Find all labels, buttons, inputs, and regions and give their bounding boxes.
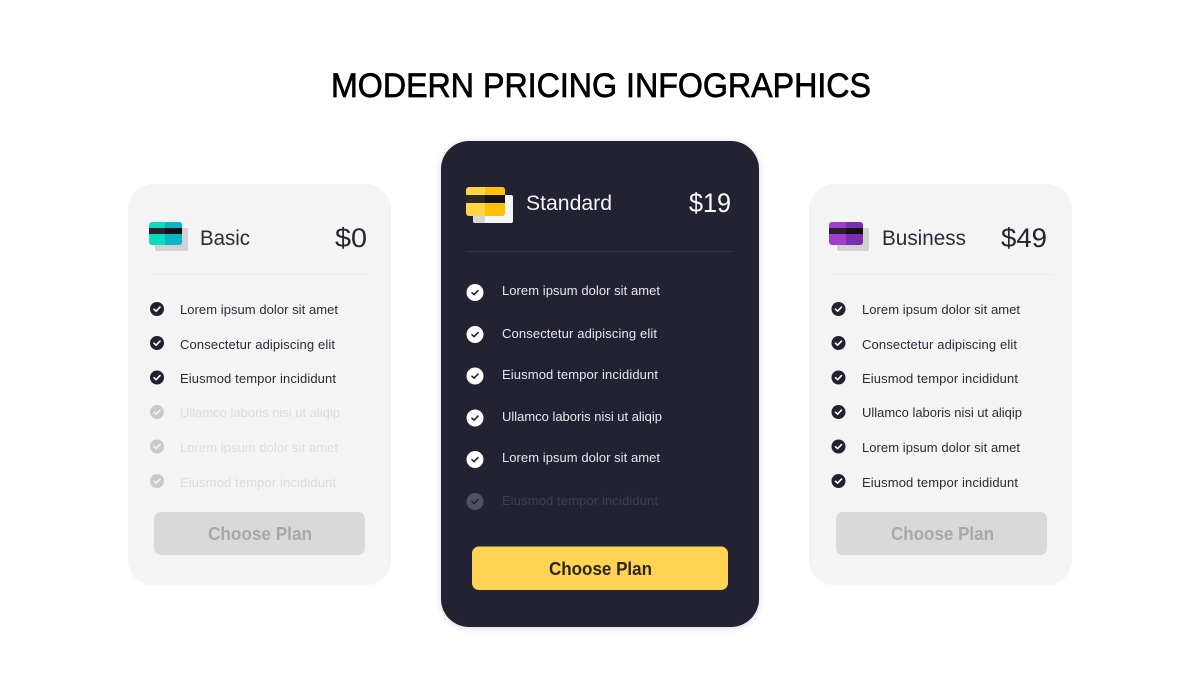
- plan name: Business: Business: [882, 227, 966, 250]
- feature: Lorem ipsum dolor sit amet: [466, 450, 660, 468]
- feature: Lorem ipsum dolor sit amet: Lorem ipsum dolor sit amet: [502, 450, 660, 465]
- feature: Consectetur adipiscing elit: Consectetur adipiscing elit: [502, 326, 657, 341]
- panel: basic plan: [128, 184, 391, 585]
- feature: Consectetur adipiscing elit: Consectetur adipiscing elit: [180, 337, 335, 352]
- feature: Eiusmod tempor incididunt: Eiusmod tempor incididunt: [180, 371, 336, 386]
- feature: Ullamco laboris nisi ut aliqip: Ullamco laboris nisi ut aliqip: [502, 409, 662, 424]
- button: Choose Plan: [836, 512, 1047, 555]
- price: $19: $19: [689, 188, 731, 218]
- button: Choose Plan: [154, 512, 365, 555]
- panel: business plan: [809, 184, 1072, 585]
- panel: standard plan: [441, 141, 759, 627]
- button: Choose Plan: [472, 546, 728, 590]
- button: Choose Plan: Choose Plan: [549, 558, 652, 579]
- feature disabled: Eiusmod tempor incididunt: Eiusmod tempor incididunt: [180, 475, 336, 490]
- icon: teal credit card: [149, 222, 188, 251]
- icon: purple credit card: [829, 222, 869, 251]
- feature: Lorem ipsum dolor sit amet: [466, 283, 660, 301]
- feature: Consectetur adipiscing elit: Consectetur adipiscing elit: [862, 337, 1017, 352]
- feature: Lorem ipsum dolor sit amet: Lorem ipsum dolor sit amet: [862, 302, 1020, 317]
- feature: Lorem ipsum dolor sit amet: Lorem ipsum dolor sit amet: [180, 302, 338, 317]
- icon: yellow credit card: [466, 187, 513, 223]
- price: $0: $0: [335, 223, 367, 253]
- feature: Eiusmod tempor incididunt: Eiusmod tempor incididunt: [862, 475, 1018, 490]
- feature disabled: Eiusmod tempor incididunt: Eiusmod tempor incididunt: [502, 493, 658, 508]
- plan name: Basic: Basic: [200, 227, 250, 250]
- button: Choose Plan: Choose Plan: [208, 523, 312, 544]
- feature disabled: Lorem ipsum dolor sit amet: Lorem ipsum dolor sit amet: [180, 440, 338, 455]
- plan name: Standard: Standard: [526, 191, 612, 215]
- feature: Lorem ipsum dolor sit amet: Lorem ipsum dolor sit amet: [502, 283, 660, 298]
- feature: Ullamco laboris nisi ut aliqip: Ullamco laboris nisi ut aliqip: [862, 405, 1022, 420]
- feature: Eiusmod tempor incididunt: [466, 367, 658, 384]
- title: MODERN PRICING INFOGRAPHICS: [331, 67, 871, 105]
- feature: Eiusmod tempor incididunt: Eiusmod tempor incididunt: [862, 371, 1018, 386]
- feature: Eiusmod tempor incididunt: Eiusmod tempor incididunt: [502, 367, 658, 382]
- feature: Lorem ipsum dolor sit amet: Lorem ipsum dolor sit amet: [862, 440, 1020, 455]
- button: Choose Plan: Choose Plan: [891, 523, 994, 544]
- price: $49: $49: [1001, 223, 1047, 253]
- feature disabled: Ullamco laboris nisi ut aliqip: Ullamco laboris nisi ut aliqip: [180, 405, 340, 420]
